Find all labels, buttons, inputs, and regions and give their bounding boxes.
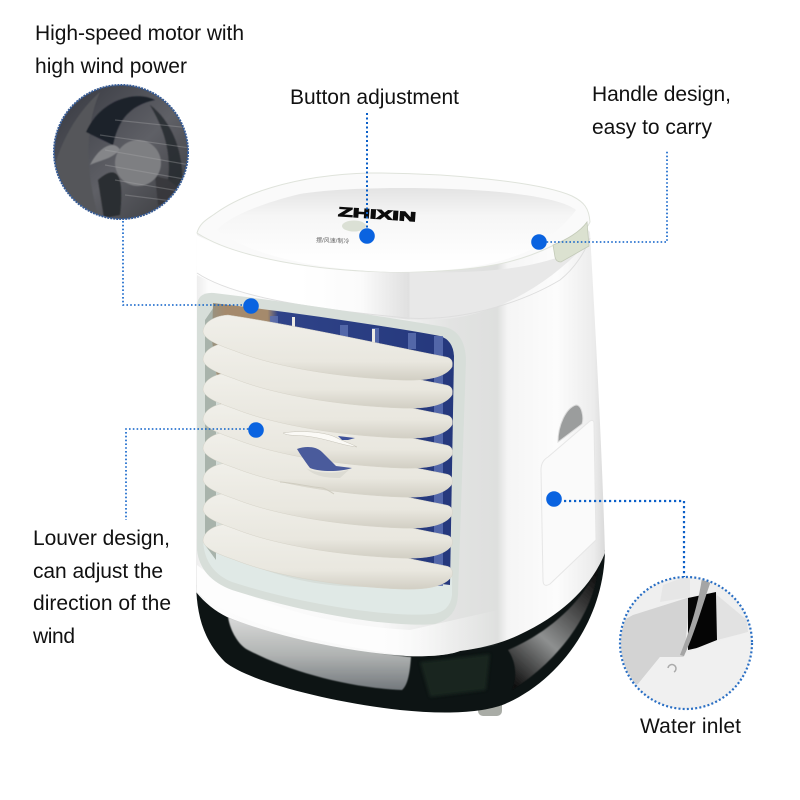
frame left inner strip	[205, 304, 216, 560]
leader line: button	[366, 113, 368, 236]
label: louver: can adjust the	[33, 560, 163, 583]
foot	[478, 700, 502, 716]
label: water inlet: Water inlet	[640, 715, 741, 738]
dark base	[196, 550, 605, 712]
handle	[553, 222, 589, 262]
water tank door	[541, 420, 596, 585]
label: louver: Louver design,	[33, 527, 170, 550]
dot: water inlet	[546, 491, 562, 507]
water inlet inset circle	[618, 576, 754, 710]
label: button: Button adjustment	[290, 86, 459, 109]
label: louver: direction of the	[33, 592, 171, 615]
side notch	[558, 405, 583, 442]
louvers	[203, 315, 452, 589]
label: motor: high wind power	[35, 55, 187, 78]
leader line: motor	[123, 221, 251, 305]
grille dividers	[292, 317, 375, 343]
dot: motor	[243, 298, 259, 314]
label: louver	[32, 527, 171, 648]
base side reflection	[508, 565, 598, 690]
base silver panel	[228, 617, 411, 690]
lid top surface	[217, 188, 576, 272]
label: motor: High-speed motor with	[35, 22, 244, 45]
leader line: louver	[126, 429, 256, 520]
dot: louver	[248, 422, 264, 438]
upper band shading	[197, 235, 590, 320]
frame lower tint	[203, 540, 452, 615]
label: handle: Handle design,	[592, 83, 731, 106]
dot: button	[359, 228, 375, 244]
louver central grip	[280, 432, 357, 494]
leader line: handle	[539, 150, 667, 242]
lid rim	[197, 173, 590, 272]
label: louver: wind	[32, 625, 75, 648]
label: handle: easy to carry	[592, 116, 712, 139]
window frame	[197, 293, 466, 625]
air cooler product	[196, 173, 605, 716]
button caption: 摆/风速/制冷	[316, 236, 350, 245]
leader line: water inlet	[554, 501, 684, 577]
label: motor	[35, 22, 244, 78]
base green tint	[420, 654, 490, 697]
dot: handle	[531, 234, 547, 250]
window blue interior	[212, 303, 454, 585]
logo: ZHIXIN	[338, 204, 417, 224]
blue stripes	[270, 316, 443, 586]
motor inset circle	[54, 85, 190, 219]
power button	[342, 220, 366, 232]
main white body	[196, 173, 605, 656]
seam	[197, 238, 590, 318]
label: handle	[592, 83, 731, 139]
lower white band	[197, 565, 498, 656]
